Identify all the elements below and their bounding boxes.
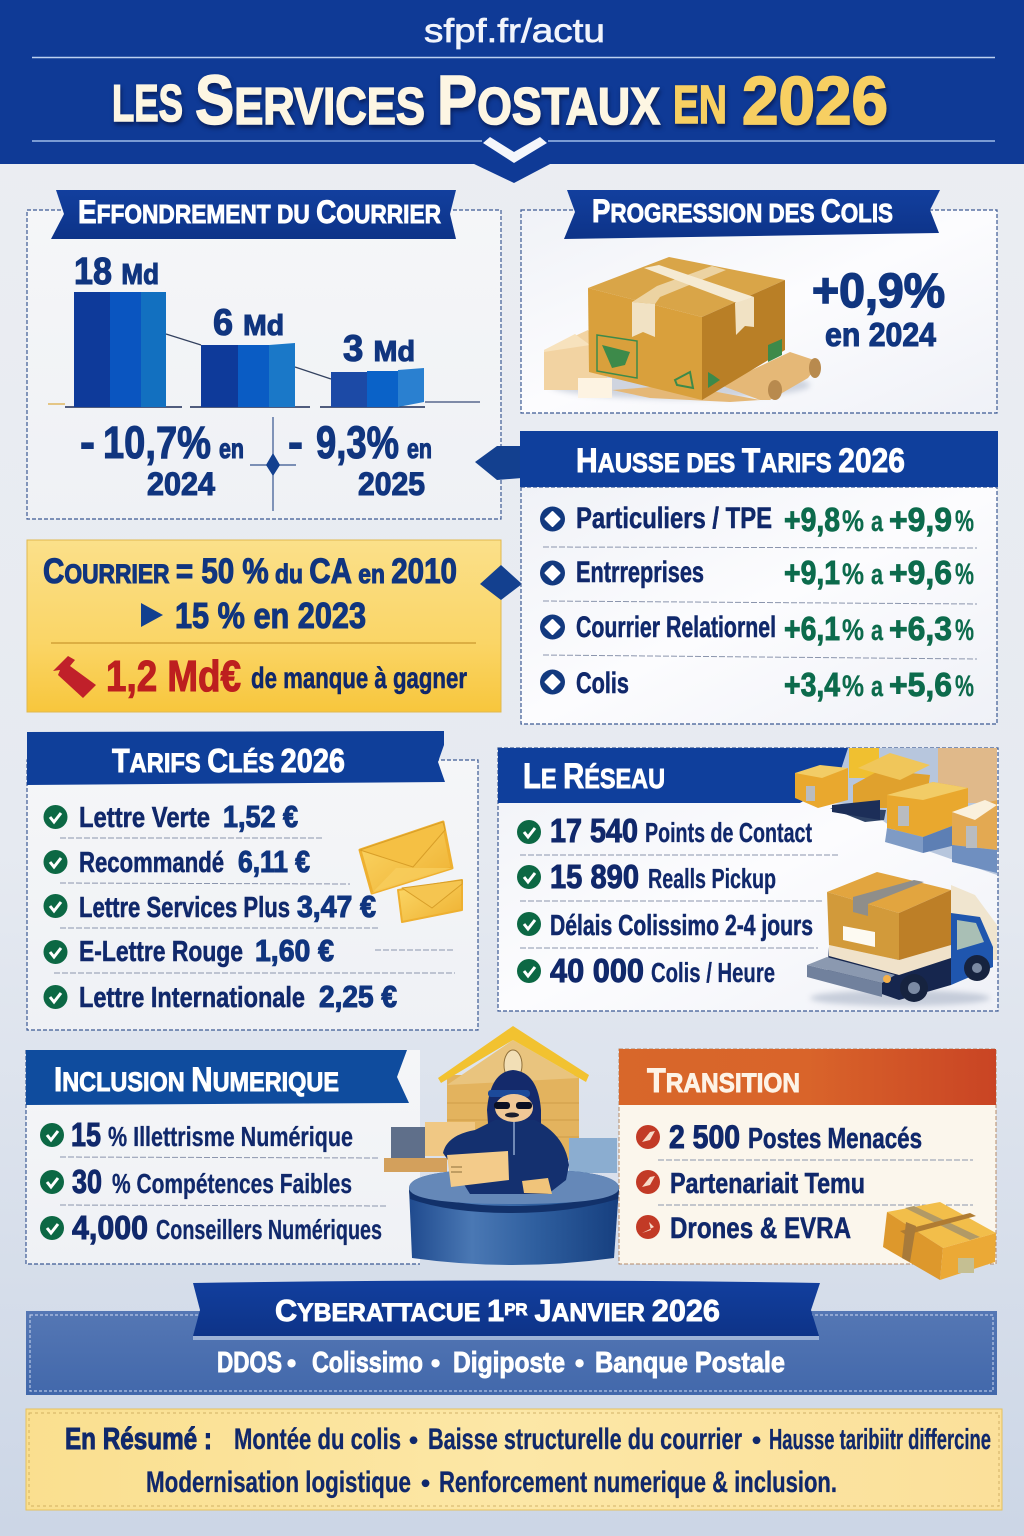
ribbon heading: INCLUSION NUMERIQUE [54,1061,339,1099]
panel: progression des colis [521,190,997,413]
row: compétences: 30 [72,1163,102,1200]
panel header: LE RÉSEAU [523,757,665,796]
row: courrier relationnel: +6,3 [889,610,952,647]
row: colis par heure: 40 000 [550,952,644,989]
row: particuliers [540,501,974,538]
panel: effondrement du courrier [27,190,501,519]
row: colis: Colis [576,667,629,700]
panel: tarifs clés [27,731,478,1030]
row: courrier relationnel: a [871,615,884,647]
ribbon heading: JANVIER 2026 [534,1293,721,1328]
arrow: from tarifs to courrier [475,446,522,480]
row: drones [636,1212,851,1245]
stat: +0,9% en 2024 [812,265,945,353]
row: lettre internationale: Lettre Internationale [79,982,305,1014]
summary line 2 [146,1466,837,1499]
targets list: • [287,1348,296,1378]
ribbon heading: TARIFS CLÉS 2026 [112,742,345,779]
ribbon heading: PROGRESSION DES COLIS [592,193,893,229]
row: colis: % [842,670,864,703]
stat: +0,9% en 2024: en 2024 [825,316,937,353]
row: illettrisme [40,1116,353,1153]
row: colis par heure [517,952,775,989]
panel header: HAUSSE DES TARIFS 2026 [576,442,905,480]
stat 2025 [288,416,432,502]
row: particuliers: +9,9 [889,501,952,538]
panel: le réseau [498,748,998,1011]
ribbon heading: CYBERATTACUE 1 [275,1293,504,1328]
panel header [520,431,998,487]
row: lettre verte: 1,52 € [223,799,298,834]
stat 2025: 2025 [358,466,425,502]
summary line 1: Baisse structurelle du courrier [428,1423,742,1456]
row: e-lettre rouge [44,933,334,968]
panel: transition [619,1049,996,1280]
row: compétences [40,1163,352,1200]
stat 2025: 9,3% [316,417,399,468]
row: conseillers: 4,000 [72,1209,148,1246]
courrier share text: COURRIER = 50 % du CA en 2010 [43,552,457,591]
icon: red down arrow [53,656,96,698]
targets list: Digiposte [453,1347,565,1379]
source url: sfpf.fr/actu [424,12,605,49]
icon: connector diamond [480,565,522,600]
header banner [0,0,1024,183]
row: compétences: % Compétences Faibles [112,1168,352,1199]
15 % text: 15 % en 2023 [175,595,366,636]
title: EN [673,75,727,135]
row: drones: Drones & EVRA [670,1212,851,1245]
summary line 1: Montée du colis [234,1423,401,1456]
panel: résumé [26,1409,1002,1510]
row: particuliers: % [955,505,974,538]
row: postes menacés [636,1119,922,1155]
targets list: Colissimo [312,1347,423,1379]
stat 2024: - [80,416,95,468]
row: entreprises: % [842,558,864,591]
row: e-lettre rouge: 1,60 € [255,933,334,968]
bar label 18 Md: 18 Md [74,251,159,293]
row: postes menacés: Postes Menacés [748,1123,922,1155]
row: illettrisme: 15 [71,1116,101,1153]
row: entreprises: +9,6 [889,554,952,591]
row: lettre internationale: 2,25 € [319,979,397,1014]
bar label 3 Md: 3 Md [343,328,415,369]
icon: parcel on pallet [544,257,821,402]
title: SERVICES [195,61,425,139]
stat: +0,9% en 2024: +0,9% [812,265,945,318]
row: points de contact [517,812,812,849]
row: particuliers: Particuliers / TPE [576,502,772,535]
bar chart [48,251,480,407]
targets list [217,1347,785,1379]
targets list: DDOS [217,1347,282,1379]
row: entreprises [540,554,974,591]
stat 2024: 10,7% [103,417,211,468]
targets list: Banque Postale [595,1347,785,1379]
panel header: TRANSITION [647,1062,800,1100]
row: colis: a [871,671,884,703]
row: courrier relationnel: % [955,614,974,647]
row: particuliers: a [871,506,884,538]
row: points de contact: Points de Contact [645,817,812,848]
panel: courrier callout [27,540,501,712]
row: lettre verte [44,799,298,834]
row: illettrisme: % Illettrisme Numérique [108,1121,353,1152]
illustration: warehouse parcels [795,748,997,875]
row: courrier relationnel: +6,1 [784,610,840,647]
stat 2024: en [219,433,244,464]
stat 2024: 2024 [147,466,215,502]
row: délais colissimo [517,910,813,942]
row: entreprises: % [955,558,974,591]
row: relais pickup [517,858,776,895]
summary line 1: • [409,1425,418,1455]
icon: envelopes [360,822,462,922]
row: particuliers: +9,8 [784,501,840,538]
bar label 6 Md: 6 Md [213,302,284,343]
summary line 2: Renforcement numerique & inclusion. [439,1466,837,1499]
row: partenariat temu: Partenariait Temu [670,1168,865,1200]
ribbon heading: EFFONDREMENT DU COURRIER [78,194,441,230]
ribbon heading: PR [504,1300,528,1319]
summary line 1: • [752,1425,761,1455]
row: courrier relationnel: % [842,614,864,647]
row: lettre services plus: 3,47 € [297,889,376,924]
row: entreprises: Entrreprises [576,556,704,589]
stat 2024 [80,416,244,502]
ribbon heading [564,190,940,239]
row: colis: % [955,670,974,703]
title: 2026 [742,63,888,139]
loss caption: de manque à gagner [251,662,467,695]
summary line 1: En Résumé : [65,1421,212,1456]
stat 2025: en [407,433,432,464]
row: e-lettre rouge: E-Lettre Rouge [79,936,243,968]
ribbon heading [193,1280,820,1340]
targets list: • [431,1348,440,1378]
title: LES [112,75,183,133]
row: délais colissimo: Délais Colissimo 2-4 jours [550,910,813,942]
row: relais pickup: Realls Pickup [648,863,776,894]
row: courrier relationnel [540,610,974,647]
row: colis: +3,4 [784,666,841,703]
summary line 2: • [421,1468,430,1498]
illustration: postal agent at counter [384,1026,619,1265]
panel: inclusion numérique [26,1050,420,1264]
panel header [498,748,848,803]
row: points de contact: 17 540 [550,812,638,849]
illustration: delivery truck [807,872,997,1006]
row: colis: +5,6 [889,666,952,703]
row: recommandé [44,844,310,879]
row: colis par heure: Colis / Heure [651,957,775,988]
stat 2025: - [288,416,303,468]
panel header [619,1049,996,1105]
row: conseillers [40,1209,382,1246]
row: courrier relationnel: Courrier Relatiornel [576,611,776,644]
row: particuliers: % [842,505,864,538]
ribbon heading [26,1050,409,1105]
loss amount: 1,2 Md€ [106,652,241,701]
row: colis [540,666,974,703]
title [112,61,888,139]
ribbon heading [27,731,445,785]
icon: parcel [883,1202,996,1280]
panel: cyberattaque [26,1280,997,1395]
chevron [483,137,547,163]
panel: hausse des tarifs [520,431,998,724]
row: lettre verte: Lettre Verte [79,802,210,834]
title: POSTAUX [437,61,660,139]
targets list: • [575,1348,584,1378]
row: conseillers: Conseillers Numériques [156,1214,382,1245]
row: relais pickup: 15 890 [550,858,639,895]
summary line 1 [65,1421,991,1456]
row: entreprises: +9,1 [784,554,840,591]
row: recommandé: 6,11 € [238,844,310,879]
row: entreprises: a [871,559,884,591]
row: postes menacés: 2 500 [669,1119,740,1155]
row: lettre services plus: Lettre Services Plus [79,892,290,924]
divider ornament [250,417,296,511]
row: recommandé: Recommandé [79,847,224,879]
icon: triangle bullet [141,603,163,627]
summary line 2: Modernisation logistique [146,1466,411,1499]
ribbon heading [51,190,456,239]
